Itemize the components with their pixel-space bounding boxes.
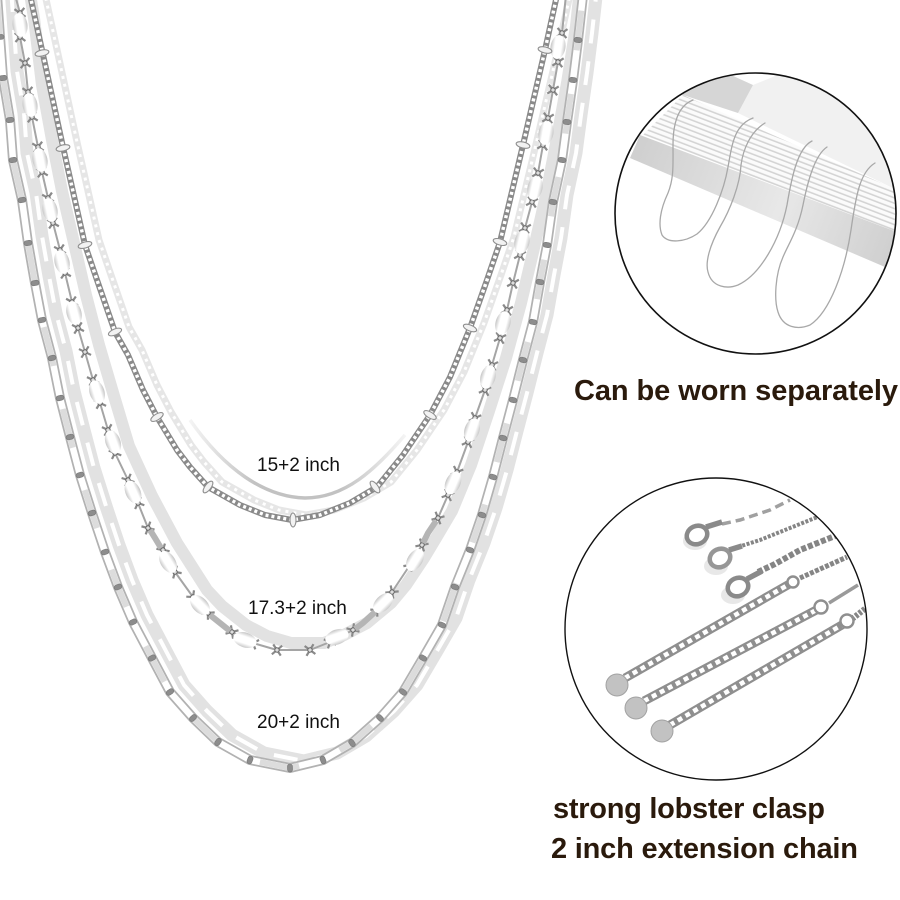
label: 17.3+2 inch: 17.3+2 inch — [248, 598, 347, 619]
label: 15+2 inch: 15+2 inch — [257, 455, 340, 476]
necklace: 17.3+2 inch lip chain — [15, 0, 566, 650]
icon: lobster clasps with chains — [683, 500, 840, 604]
necklace: 15+2 inch curb chain — [30, 0, 557, 520]
heading: can be worn separately: Can be worn separately — [574, 375, 898, 407]
heading: strong lobster clasp: strong lobster clasp — [553, 793, 825, 825]
icon: three thin chains — [660, 100, 875, 327]
heading: 2 inch extension chain: 2 inch extension chain — [551, 833, 858, 865]
chain shadow: fine chain — [44, 0, 571, 515]
necklace: 20+2 inch paperclip chain — [0, 0, 583, 768]
label: 20+2 inch: 20+2 inch — [257, 712, 340, 733]
panel: worn separately photo — [610, 70, 900, 360]
crescent reflection — [190, 420, 405, 498]
chain shadows — [11, 0, 597, 761]
panel: clasp and extension photo — [564, 477, 868, 781]
icon: extension chains with tag discs — [606, 557, 866, 742]
